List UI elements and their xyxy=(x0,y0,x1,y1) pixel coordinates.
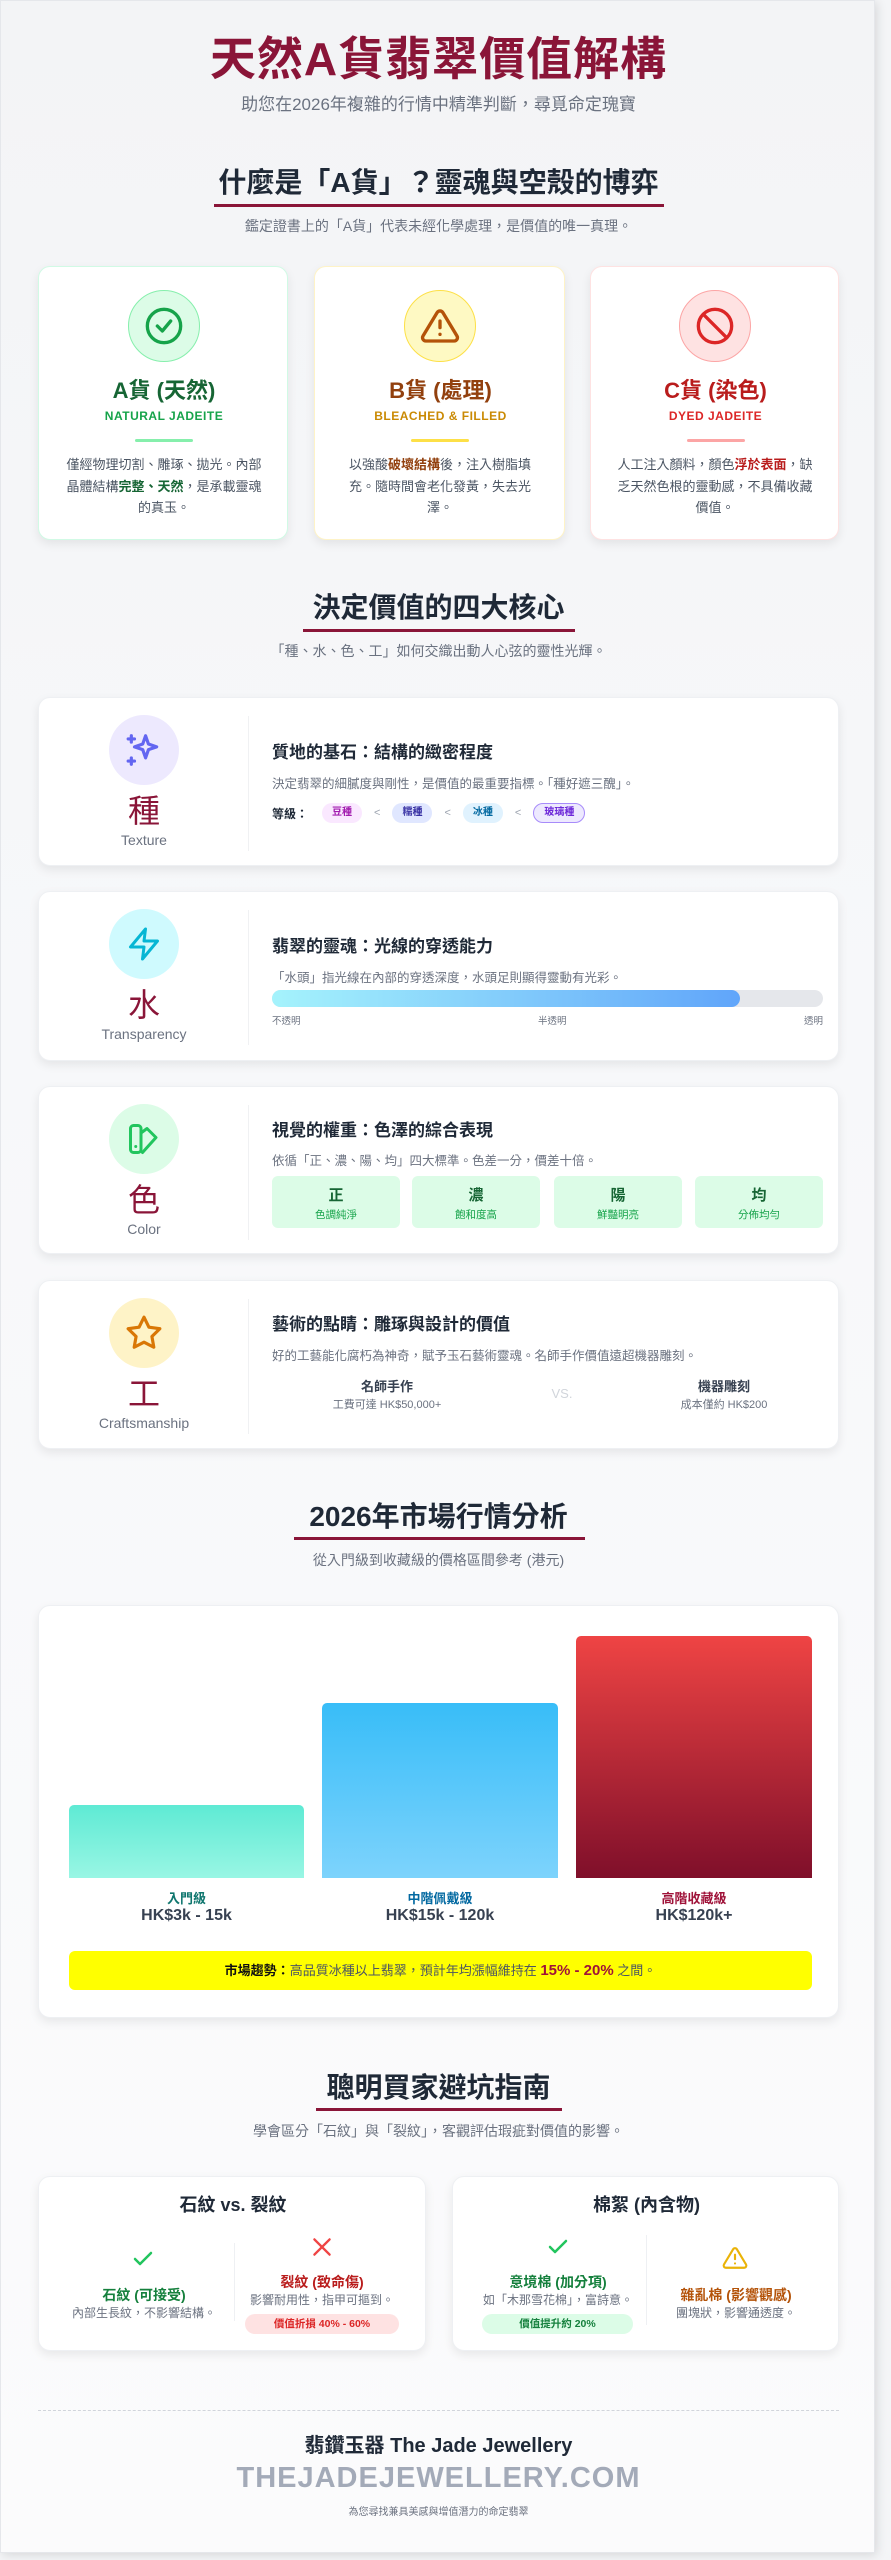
section subtitle: buyer guide: 學會區分「石紋」與「裂紋」，客觀評估瑕疵對價值的影響。 xyxy=(253,2123,624,2139)
panel: B貨 card xyxy=(314,266,565,540)
icon: cross xyxy=(313,2238,331,2256)
bar labels: 入門級 xyxy=(167,1891,206,1906)
panel: C貨 card xyxy=(590,266,839,540)
bar chart panel: HK$120k+ xyxy=(656,1907,732,1924)
heading: 翡翠的靈魂：光線的穿透能力 xyxy=(272,937,493,956)
label: Craftsmanship xyxy=(99,1415,189,1431)
icon: sparkle xyxy=(109,715,179,785)
label: DYED JADEITE xyxy=(669,409,762,423)
label: BLEACHED & FILLED xyxy=(374,409,507,423)
label: NATURAL JADEITE xyxy=(105,409,223,423)
section subtitle: four cores: 「種、水、色、工」如何交織出動人心弦的靈性光輝。 xyxy=(270,643,606,659)
item: 雜亂棉: 雜亂棉 (影響觀感) xyxy=(680,2287,792,2303)
heading: C貨 (染色) xyxy=(664,378,767,403)
panel: 水 transparency xyxy=(38,891,839,1061)
item: 意境棉: 意境棉 (加分項) xyxy=(509,2274,607,2290)
bar chart panel xyxy=(38,1605,839,2018)
bar chart panel: HK$15k - 120k xyxy=(386,1907,494,1924)
panel: 色 color xyxy=(38,1086,839,1254)
description: 以強酸破壞結構後，注入樹脂填充。隨時間會老化發黃，失去光澤。 xyxy=(349,457,531,515)
footer tagline: 為您尋找兼具美感與增值潛力的命定翡翠 xyxy=(348,2507,528,2518)
item: 裂紋: 影響耐用性，指甲可摳到。 xyxy=(250,2293,394,2307)
label: Color xyxy=(127,1221,161,1237)
grade pills: 等級： < < < xyxy=(272,806,521,820)
section heading: buyer guide: 聰明買家避坑指南 xyxy=(326,2072,550,2103)
item: 石紋: 內部生長紋，不影響結構。 xyxy=(72,2306,216,2320)
bar: entry xyxy=(69,1805,304,1878)
description: 決定翡翠的細膩度與剛性，是價值的最重要指標。「種好遮三醜」。 xyxy=(272,777,635,791)
color criteria boxes xyxy=(272,1176,823,1228)
bar: mid xyxy=(322,1703,558,1878)
panel: A貨 card xyxy=(38,266,288,540)
section heading: market: 2026年市場行情分析 xyxy=(309,1501,568,1532)
icon: zap xyxy=(109,909,179,979)
icon: star xyxy=(109,1298,179,1368)
item: 裂紋: 裂紋 (致命傷) xyxy=(280,2274,364,2290)
description: 僅經物理切割、雕琢、拋光。內部晶體結構完整、天然，是承載靈魂的真玉。 xyxy=(66,457,262,515)
item: 意境棉: 價值提升約 20% xyxy=(519,2318,596,2330)
color criteria boxes: 正 xyxy=(328,1187,344,1204)
description: 依循「正、濃、陽、均」四大標準。色差一分，價差十倍。 xyxy=(272,1154,597,1168)
heading: A貨 (天然) xyxy=(113,378,215,403)
callout: market trend xyxy=(69,1951,812,1990)
label: Transparency xyxy=(101,1026,187,1042)
heading: 棉絮 (內含物) xyxy=(593,2195,700,2215)
grade pills: 冰種 xyxy=(473,807,493,818)
footer brand: 翡鑽玉器 The Jade Jewellery xyxy=(305,2435,572,2457)
color criteria boxes: 均 xyxy=(751,1187,766,1204)
icon: check circle xyxy=(128,290,200,362)
bar chart panel: 高階收藏級 xyxy=(661,1891,726,1906)
comparison: VS. xyxy=(552,1386,572,1401)
big char: 種 xyxy=(128,793,160,829)
color criteria boxes: 陽 xyxy=(610,1187,626,1204)
bar labels: 不透明 xyxy=(272,1016,301,1027)
item: 雜亂棉: 團塊狀，影響通透度。 xyxy=(676,2306,796,2320)
item: 意境棉 xyxy=(482,2240,633,2334)
footer url: THEJADEJEWELLERY.COM xyxy=(236,2462,641,2494)
label: Texture xyxy=(121,832,167,848)
description: 好的工藝能化腐朽為神奇，賦予玉石藝術靈魂。名師手作價值遠超機器雕刻。 xyxy=(272,1349,697,1363)
item: 裂紋: 價值折損 40% - 60% xyxy=(274,2318,370,2330)
panel: 石紋 vs 裂紋 xyxy=(38,2176,426,2351)
item: 石紋: 石紋 (可接受) xyxy=(102,2287,186,2303)
icon: warning xyxy=(404,290,476,362)
bar labels: 透明 xyxy=(804,1016,823,1027)
icon: ban xyxy=(679,290,751,362)
bar labels xyxy=(272,1016,823,1027)
heading: 石紋 vs. 裂紋 xyxy=(179,2195,287,2215)
comparison: 工費可達 HK$50,000+ xyxy=(333,1399,441,1411)
color criteria boxes: 鮮豔明亮 xyxy=(597,1209,639,1221)
description: 「水頭」指光線在內部的穿透深度，水頭足則顯得靈動有光彩。 xyxy=(272,971,622,985)
section heading: four cores: 決定價值的四大核心 xyxy=(312,592,564,623)
comparison xyxy=(333,1379,767,1411)
callout: market trend: 市場趨勢：高品質冰種以上翡翠，預計年均漲幅維持在 15% - 20% 之間。 xyxy=(225,1962,656,1979)
item: 意境棉: 如「木那雪花棉」，富詩意。 xyxy=(483,2293,633,2307)
big char: 色 xyxy=(128,1182,160,1218)
icon: swatch xyxy=(109,1104,179,1174)
bar: high xyxy=(576,1636,812,1878)
heading: 質地的基石：結構的緻密程度 xyxy=(272,743,493,762)
big char: 工 xyxy=(128,1376,160,1412)
panel: 工 craftsmanship xyxy=(38,1280,839,1449)
icon: check xyxy=(548,2240,568,2254)
item: 裂紋 xyxy=(245,2238,399,2334)
color criteria boxes: 飽和度高 xyxy=(455,1209,497,1221)
heading: 視覺的權重：色澤的綜合表現 xyxy=(272,1121,493,1140)
progress bar xyxy=(272,990,823,1007)
color criteria boxes: 分佈均勻 xyxy=(738,1209,780,1221)
item: 雜亂棉 xyxy=(676,2247,796,2320)
bar chart panel: HK$3k - 15k xyxy=(141,1907,232,1924)
color criteria boxes: 色調純淨 xyxy=(315,1209,357,1221)
section heading: A貨: 什麼是「A貨」？靈魂與空殼的博弈 xyxy=(218,167,659,198)
icon: check xyxy=(134,2252,152,2266)
description: 人工注入顏料，顏色浮於表面，缺乏天然色根的靈動感，不具備收藏價值。 xyxy=(617,457,813,515)
panel: 棉絮 xyxy=(452,2176,839,2351)
grade pills: 豆種 xyxy=(332,807,352,818)
comparison: 名師手作 xyxy=(361,1379,413,1394)
title: 天然A貨翡翠價值解構 xyxy=(210,33,667,85)
bar labels: 半透明 xyxy=(538,1016,566,1027)
bar chart panel: 中階佩戴級 xyxy=(407,1891,472,1906)
color criteria boxes: 濃 xyxy=(468,1187,484,1204)
grade pills xyxy=(272,803,585,823)
section subtitle: market: 從入門級到收藏級的價格區間參考 (港元) xyxy=(313,1552,564,1568)
grade pills: 糯種 xyxy=(402,807,422,818)
grade pills: 玻璃種 xyxy=(544,807,574,818)
item: 石紋 xyxy=(72,2252,216,2320)
comparison: 成本僅約 HK$200 xyxy=(681,1399,767,1411)
panel: 種 texture xyxy=(38,697,839,866)
subtitle: 助您在2026年複雜的行情中精準判斷，尋覓命定瑰寶 xyxy=(241,95,636,114)
comparison: 機器雕刻 xyxy=(698,1379,750,1394)
icon: warning xyxy=(722,2247,748,2269)
section subtitle: A貨: 鑑定證書上的「A貨」代表未經化學處理，是價值的唯一真理。 xyxy=(245,218,632,234)
heading: 藝術的點睛：雕琢與設計的價值 xyxy=(272,1315,510,1334)
heading: B貨 (處理) xyxy=(389,378,492,403)
big char: 水 xyxy=(128,987,160,1023)
